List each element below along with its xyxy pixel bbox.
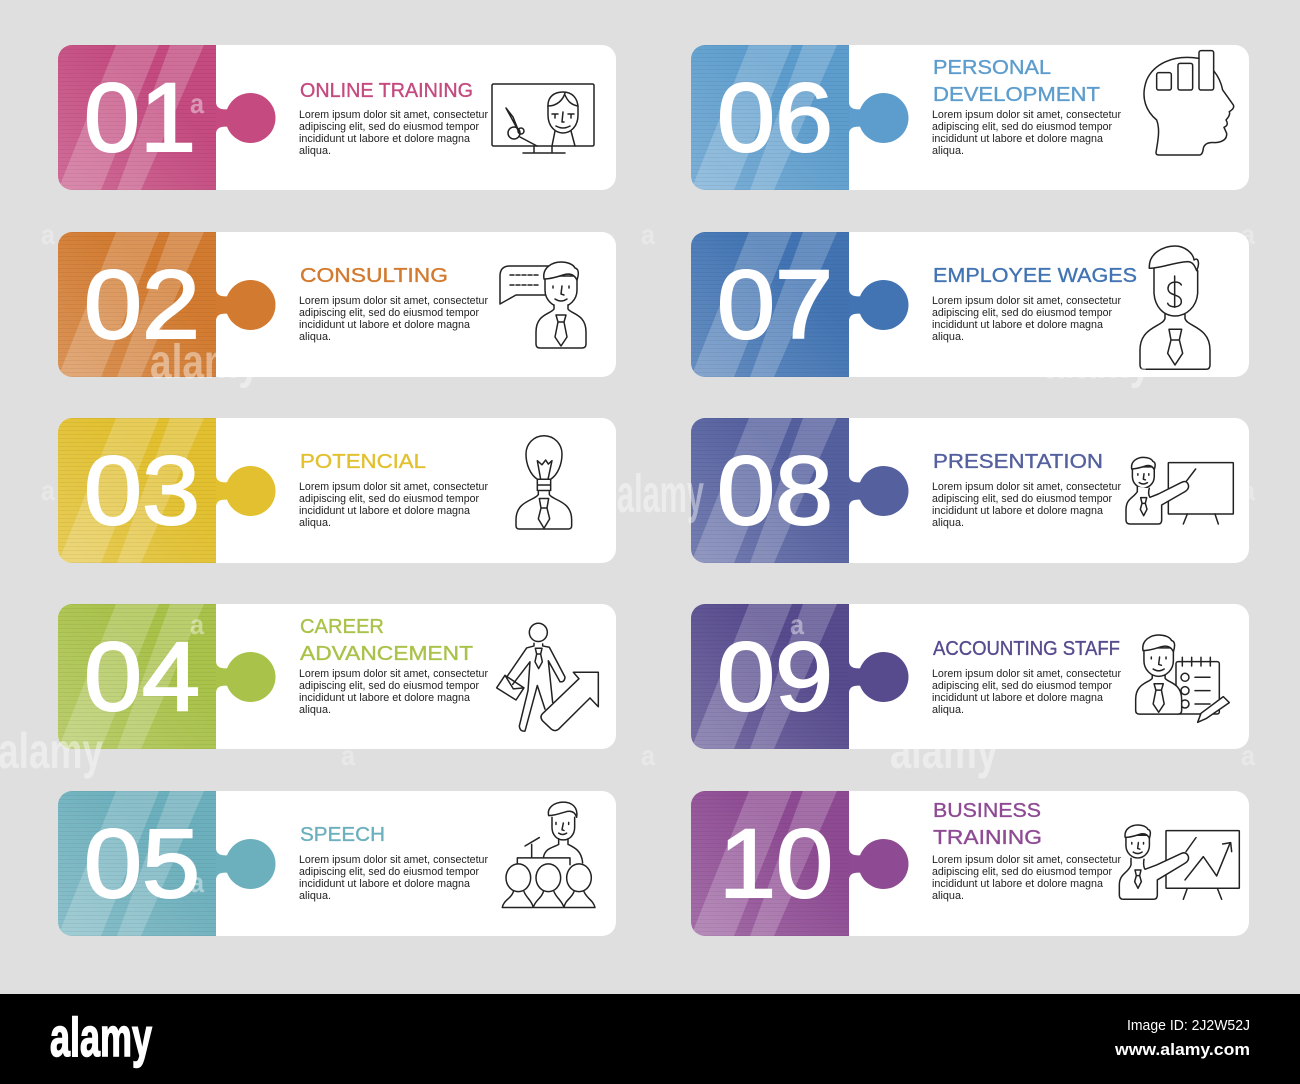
text block 10: [932, 854, 1121, 902]
small grey watermarks: a: [641, 740, 655, 771]
text block 05: incididunt ut labore et dolore magna: [299, 878, 471, 890]
panel: 05 speech: [58, 791, 616, 936]
number 09: 09: [717, 622, 833, 731]
icon: trainer with growth chart: [1119, 825, 1239, 899]
heading: presentation: PRESENTATION: [933, 451, 1103, 473]
heading: business training: [933, 800, 1042, 849]
text block 03: [299, 481, 488, 529]
number 07: 07: [717, 250, 833, 359]
text block 07: incididunt ut labore et dolore magna: [932, 319, 1104, 331]
text block 07: adipiscing elit, sed do eiusmod tempor: [932, 307, 1112, 319]
text block 10: Lorem ipsum dolor sit amet, consectetur: [932, 854, 1121, 866]
panel: 02 consulting: [58, 232, 616, 377]
text block 03: aliqua.: [299, 517, 331, 529]
heading: personal development: [933, 57, 1100, 106]
heading: career advancement: ADVANCEMENT: [300, 643, 473, 665]
text block 10: incididunt ut labore et dolore magna: [932, 878, 1104, 890]
text block 04: Lorem ipsum dolor sit amet, consectetur: [299, 668, 488, 680]
icon: accountant with checklist: [1136, 635, 1229, 722]
heading: accounting staff: ACCOUNTING STAFF: [933, 638, 1120, 660]
number tile 08: [691, 418, 1249, 563]
heading: consulting: CONSULTING: [300, 265, 448, 287]
text block 03: adipiscing elit, sed do eiusmod tempor: [299, 493, 479, 505]
text block 08: adipiscing elit, sed do eiusmod tempor: [932, 493, 1112, 505]
text block 04: aliqua.: [299, 704, 331, 716]
text block 06: [932, 109, 1121, 157]
number 08: 08: [717, 436, 833, 545]
heading: personal development: DEVELOPMENT: [933, 84, 1100, 106]
text block 04: incididunt ut labore et dolore magna: [299, 692, 471, 704]
watermarks: a: [190, 867, 204, 898]
number tile 10: [691, 791, 1249, 936]
panel: 07 employee wages: [691, 232, 1249, 377]
text block 02: aliqua.: [299, 331, 331, 343]
watermarks: alamy: [0, 723, 103, 779]
icon: head with bar chart: [1144, 51, 1234, 155]
icon: consultant with speech bubble: [500, 262, 586, 348]
text block 03: Lorem ipsum dolor sit amet, consectetur: [299, 481, 488, 493]
number tile 01: [58, 45, 616, 190]
small grey watermarks: a: [1241, 219, 1255, 250]
watermarks: alamy: [1043, 336, 1151, 389]
text block 06: adipiscing elit, sed do eiusmod tempor: [932, 121, 1112, 133]
heading: career advancement: [300, 616, 473, 665]
text block 08: [932, 481, 1121, 529]
number 05: 05: [84, 809, 200, 918]
text block 04: adipiscing elit, sed do eiusmod tempor: [299, 680, 479, 692]
number tile 05: [58, 791, 616, 936]
text block 02: [299, 295, 488, 343]
heading: speech: SPEECH: [300, 824, 385, 846]
text block 09: incididunt ut labore et dolore magna: [932, 692, 1104, 704]
heading: online training: ONLINE TRAINING: [300, 80, 473, 102]
small grey watermarks: [41, 219, 1255, 771]
number tile 07: [691, 232, 1249, 377]
heading: personal development: PERSONAL: [933, 57, 1051, 79]
text block 08: Lorem ipsum dolor sit amet, consectetur: [932, 481, 1121, 493]
number 01: 01: [84, 63, 196, 172]
site url: www.alamy.com: [1114, 1040, 1250, 1059]
panel: 10 business training: [691, 791, 1249, 936]
small grey watermarks: a: [1241, 740, 1255, 771]
watermarks: [0, 88, 1151, 898]
alamy logo: alamy: [50, 1006, 152, 1068]
text block 01: aliqua.: [299, 145, 331, 157]
small grey watermarks: a: [1241, 475, 1255, 506]
text block 05: [299, 854, 488, 902]
small grey watermarks: a: [41, 475, 55, 506]
watermarks: alamy: [617, 464, 704, 524]
small grey watermarks: a: [341, 740, 355, 771]
text block 07: Lorem ipsum dolor sit amet, consectetur: [932, 295, 1121, 307]
watermarks: alamy: [890, 723, 998, 779]
icon: online training monitor: [492, 84, 594, 153]
panel: 03 potencial: [58, 418, 616, 563]
panel: 04 career advancement: [58, 604, 616, 749]
icon: employee with dollar face: [1140, 246, 1210, 369]
heading: career advancement: CAREER: [300, 616, 384, 638]
panel: 09 accounting staff: [691, 604, 1249, 749]
watermarks: a: [190, 609, 204, 640]
text block 01: [299, 109, 488, 157]
text block 06: Lorem ipsum dolor sit amet, consectetur: [932, 109, 1121, 121]
text block 02: adipiscing elit, sed do eiusmod tempor: [299, 307, 479, 319]
number tile 06: [691, 45, 1249, 190]
text block 01: Lorem ipsum dolor sit amet, consectetur: [299, 109, 488, 121]
panel: 01 online training: [58, 45, 616, 190]
number tile 09: [691, 604, 1249, 749]
footer bar: [0, 994, 1300, 1084]
number tile 03: [58, 418, 616, 563]
heading: business training: TRAINING: [933, 827, 1042, 849]
icon: light bulb head: [516, 436, 572, 529]
text block 08: aliqua.: [932, 517, 964, 529]
icon: career figure with arrow: [497, 623, 598, 731]
heading: employee wages: EMPLOYEE WAGES: [933, 265, 1137, 287]
text block 02: incididunt ut labore et dolore magna: [299, 319, 471, 331]
panel: 08 presentation: [691, 418, 1249, 563]
watermarks: a: [790, 609, 804, 640]
text block 09: Lorem ipsum dolor sit amet, consectetur: [932, 668, 1121, 680]
image id: Image ID: 2J2W52J: [1127, 1017, 1250, 1034]
text block 04: [299, 668, 488, 716]
text block 09: aliqua.: [932, 704, 964, 716]
text block 09: adipiscing elit, sed do eiusmod tempor: [932, 680, 1112, 692]
small grey watermarks: a: [41, 219, 55, 250]
icon: speaker and audience: [502, 802, 595, 908]
text block 06: aliqua.: [932, 145, 964, 157]
number tile 02: [58, 232, 616, 377]
text block 03: incididunt ut labore et dolore magna: [299, 505, 471, 517]
text block 08: incididunt ut labore et dolore magna: [932, 505, 1104, 517]
text block 09: [932, 668, 1121, 716]
number 03: 03: [84, 436, 200, 545]
text block 06: incididunt ut labore et dolore magna: [932, 133, 1104, 145]
text block 05: adipiscing elit, sed do eiusmod tempor: [299, 866, 479, 878]
text block 02: Lorem ipsum dolor sit amet, consectetur: [299, 295, 488, 307]
watermarks: a: [190, 88, 204, 119]
icon: presenter at board: [1126, 457, 1233, 524]
number tile 04: [58, 604, 616, 749]
number 04: 04: [84, 622, 200, 731]
watermarks: alamy: [150, 336, 260, 389]
text block 07: [932, 295, 1121, 343]
number 06: 06: [717, 63, 833, 172]
small grey watermarks: a: [641, 219, 655, 250]
text block 01: adipiscing elit, sed do eiusmod tempor: [299, 121, 479, 133]
text block 10: aliqua.: [932, 890, 964, 902]
text block 10: adipiscing elit, sed do eiusmod tempor: [932, 866, 1112, 878]
heading: business training: BUSINESS: [933, 800, 1041, 822]
text block 07: aliqua.: [932, 331, 964, 343]
panel: 06 personal development: [691, 45, 1249, 190]
text block 05: Lorem ipsum dolor sit amet, consectetur: [299, 854, 488, 866]
heading: potencial: POTENCIAL: [300, 451, 426, 473]
number 10: 10: [719, 809, 833, 918]
text block 01: incididunt ut labore et dolore magna: [299, 133, 471, 145]
number 02: 02: [84, 250, 200, 359]
text block 05: aliqua.: [299, 890, 331, 902]
